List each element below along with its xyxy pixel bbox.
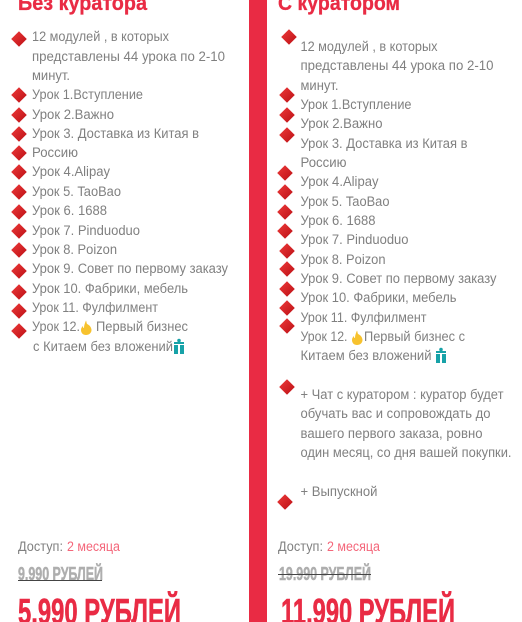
lesson list: right: Россию: [300, 155, 346, 170]
lesson list: right: Урок 12.: [300, 329, 348, 344]
bullet icons: right list: [277, 29, 297, 510]
curator chat text: вашего первого заказа, ровно: [300, 426, 482, 441]
lesson list: right: Урок 4.Alipay: [300, 174, 379, 189]
lesson list: left: Урок 4.Alipay: [32, 164, 110, 179]
lesson list: left: с Китаем без вложений: [33, 339, 173, 354]
lesson list: right: Урок 1.Вступление: [300, 97, 412, 112]
lesson list: right: представлены 44 урока по 2-10: [300, 58, 494, 73]
lesson list: right: Урок 6. 1688: [300, 213, 376, 228]
curator chat text: [300, 387, 512, 460]
old price: 9.990 РУБЛЕЙ: [18, 563, 103, 584]
lesson list: left: Урок 6. 1688: [32, 203, 107, 218]
lesson list: left: [32, 29, 228, 354]
lesson list: right: Первый бизнес с: [364, 329, 465, 344]
lesson list: left: Урок 3. Доставка из Китая в: [32, 126, 199, 141]
old price: [18, 563, 103, 584]
lesson list: right: Урок 5. TaoBao: [300, 194, 390, 209]
lesson list: right: 12 модулей , в которых: [300, 39, 438, 54]
access period: [278, 539, 380, 554]
lesson list: right: Урок 7. Pinduoduo: [300, 232, 408, 247]
lesson list: left: Урок 2.Важно: [32, 107, 114, 122]
access period: Доступ:: [18, 539, 63, 554]
lesson list: left: Первый бизнес: [96, 319, 188, 334]
panel: without curator: [11, 0, 228, 622]
lesson list: left: минут.: [32, 68, 70, 83]
lesson list: right: Урок 11. Фулфилмент: [300, 310, 426, 325]
icon: gift: [436, 348, 446, 363]
lesson list: right: Урок 2.Важно: [300, 116, 382, 131]
icon: flame: [81, 320, 92, 335]
access period: 2 месяца: [327, 539, 380, 554]
bullet icons: left list: [11, 31, 27, 339]
panel: with curator: [277, 0, 512, 622]
lesson list: left: Урок 5. TaoBao: [32, 184, 121, 199]
icon: gift: [174, 339, 184, 354]
lesson list: left: Урок 8. Poizon: [32, 242, 117, 257]
curator chat text: + Чат с куратором : куратор будет: [300, 387, 504, 402]
lesson list: left: Урок 9. Совет по первому заказу: [32, 261, 228, 276]
lesson list: left: Урок 7. Pinduoduo: [32, 223, 140, 238]
lesson list: right: Урок 8. Poizon: [300, 252, 386, 267]
lesson list: left: представлены 44 урока по 2-10: [32, 49, 225, 64]
lesson list: left: Урок 12.: [32, 319, 80, 334]
curator chat text: один месяц, со дня вашей покупки.: [300, 445, 512, 460]
access period: Доступ:: [278, 539, 323, 554]
lesson list: right: Урок 3. Доставка из Китая в: [300, 136, 468, 151]
access period: 2 месяца: [67, 539, 120, 554]
panel divider: red bar: [249, 0, 267, 622]
lesson list: left: Урок 11. Фулфилмент: [32, 300, 158, 315]
icon: flame: [352, 330, 362, 345]
lesson list: right: Урок 9. Совет по первому заказу: [300, 271, 497, 286]
lesson list: right: минут.: [300, 78, 338, 93]
lesson list: left: Урок 10. Фабрики, мебель: [32, 281, 188, 296]
graduation text: + Выпускной: [300, 484, 378, 499]
lesson list: right: [300, 39, 497, 363]
lesson list: right: Урок 10. Фабрики, мебель: [300, 290, 456, 305]
old price: 19.990 РУБЛЕЙ: [279, 563, 371, 584]
lesson list: left: Урок 1.Вступление: [32, 87, 143, 102]
lesson list: left: Россию: [32, 145, 78, 160]
curator chat text: обучать вас и сопровождать до: [300, 406, 490, 421]
old price: [278, 563, 371, 584]
access period: [18, 539, 120, 554]
lesson list: left: 12 модулей , в которых: [32, 29, 169, 44]
lesson list: right: Китаем без вложений: [300, 348, 432, 363]
